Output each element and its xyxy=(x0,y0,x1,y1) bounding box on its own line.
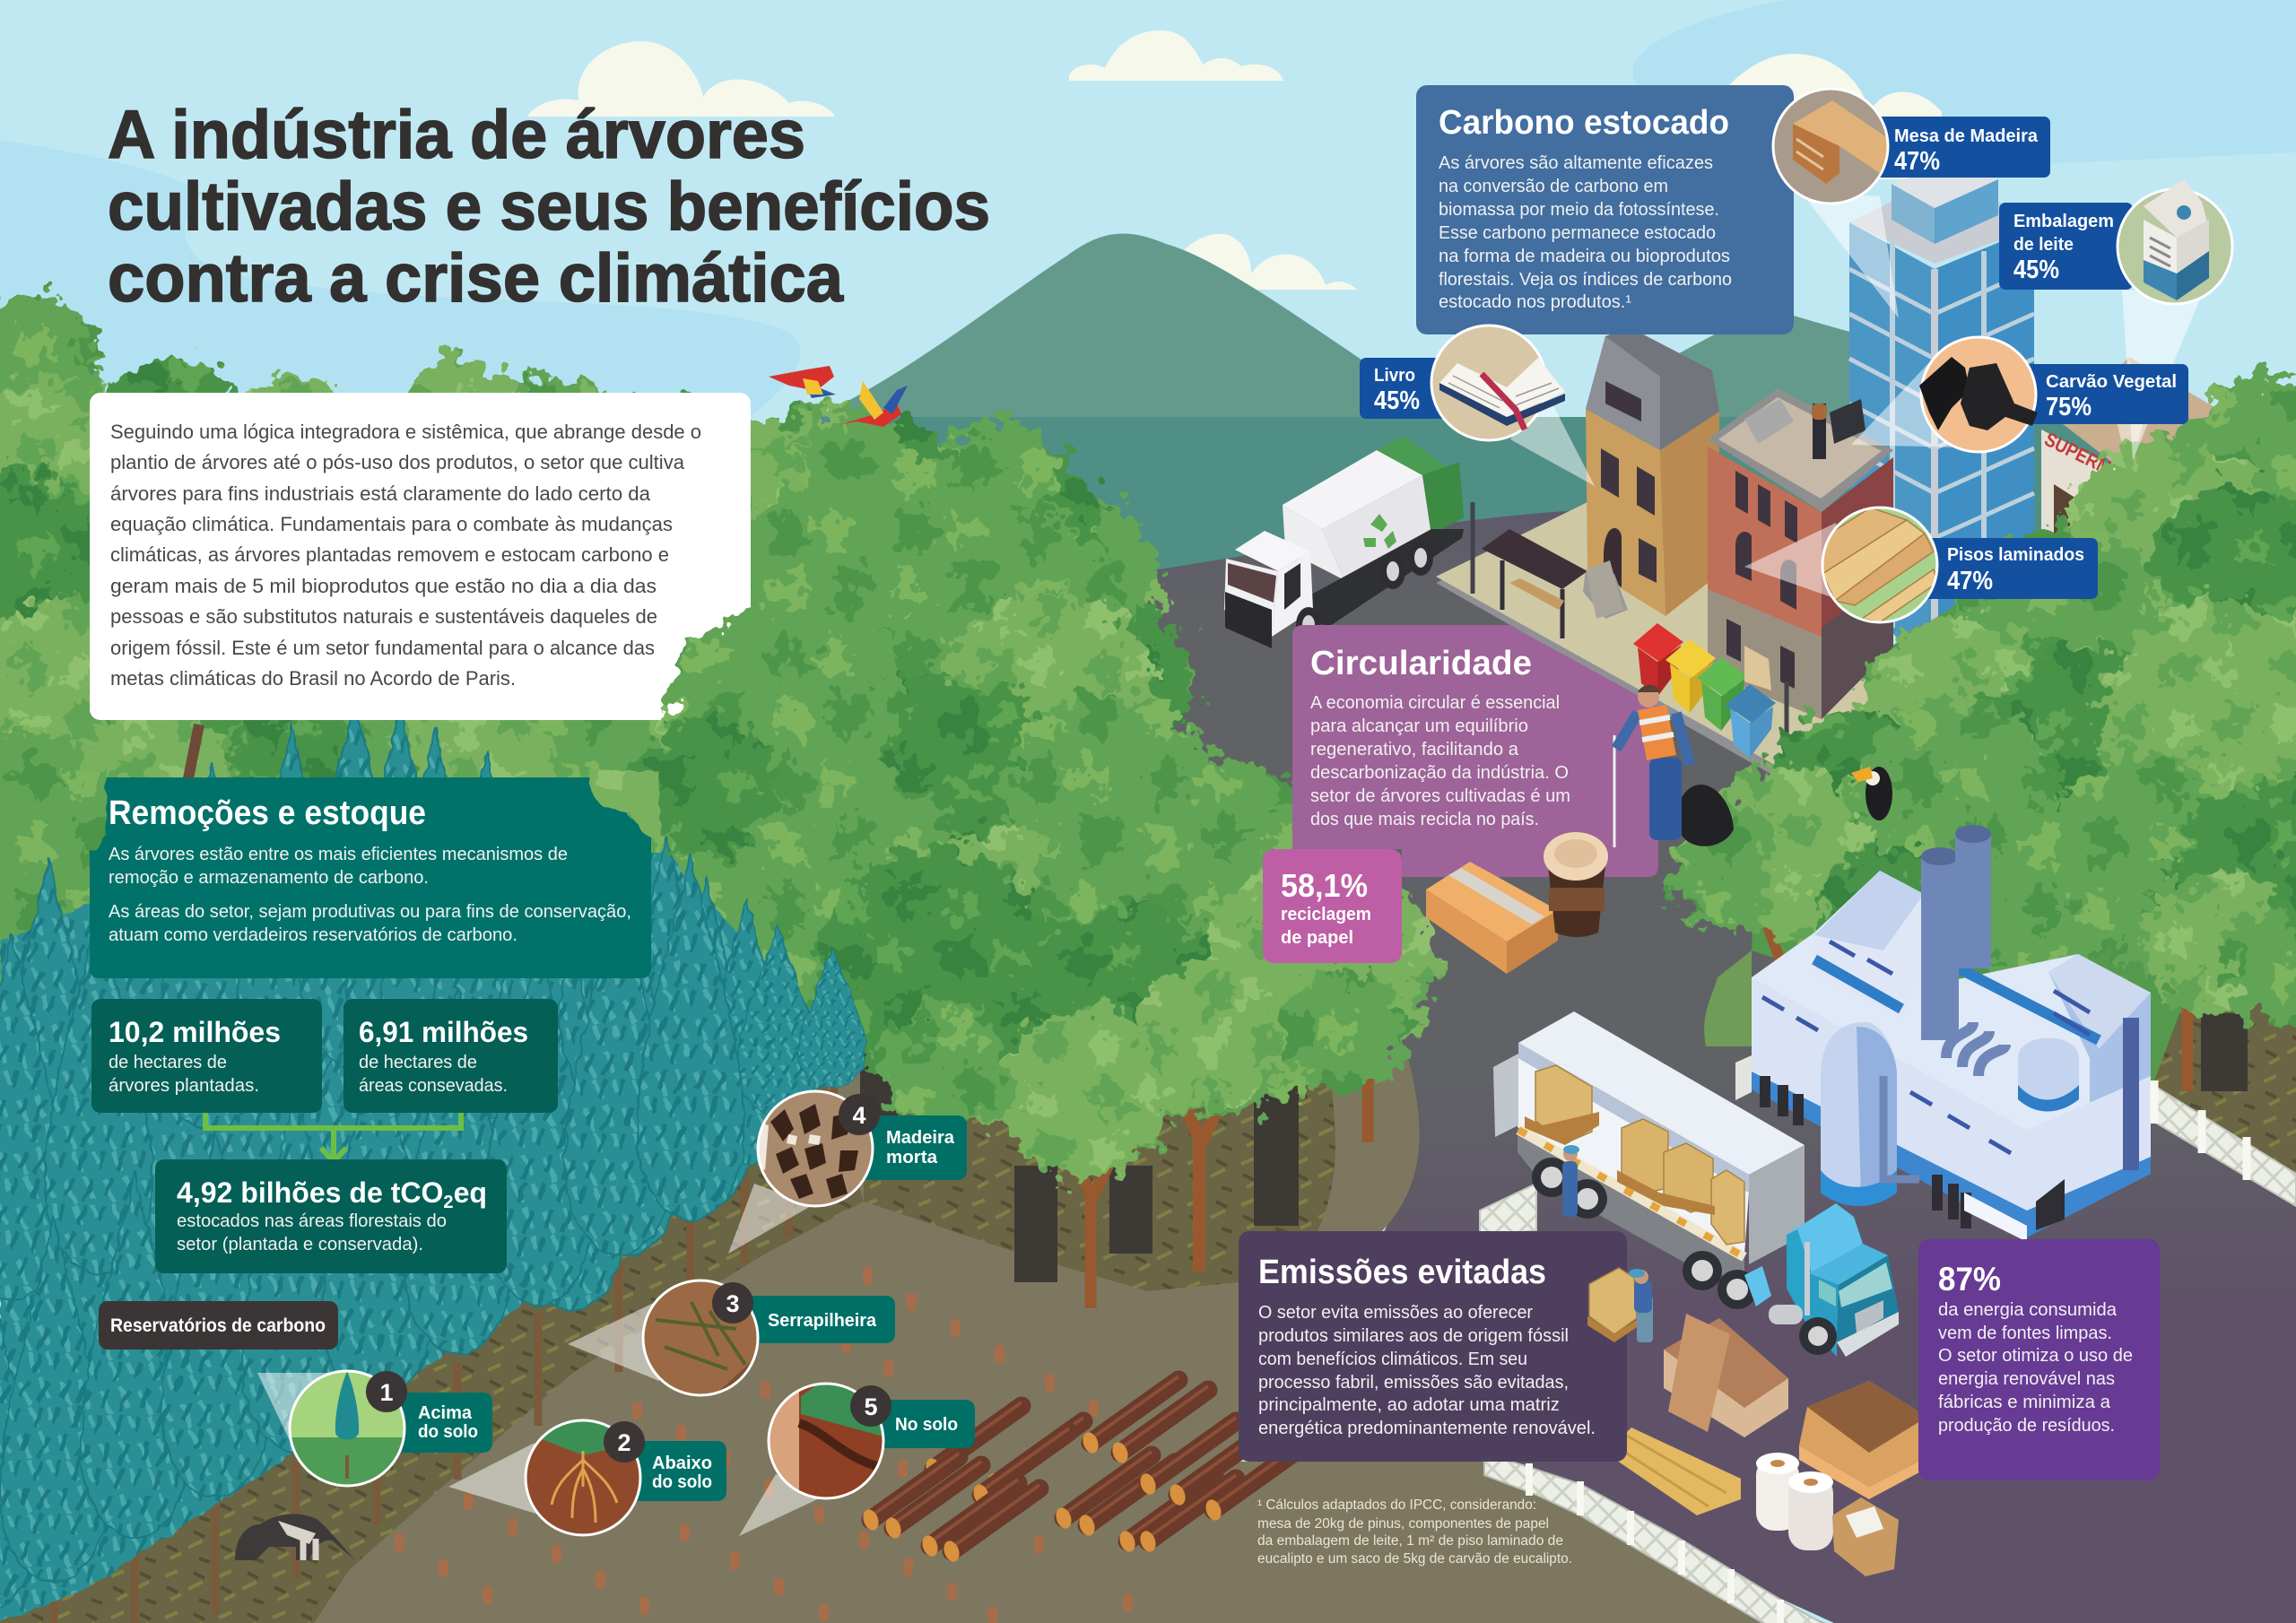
semi truck xyxy=(1493,1011,1899,1357)
carbon pool 2: abaixo do solo: Abaixo xyxy=(652,1454,712,1473)
toucan xyxy=(1851,767,1892,820)
central tree mass xyxy=(655,404,1435,1179)
product: carvão vegetal xyxy=(1919,337,2188,452)
recycling bins xyxy=(1633,623,1776,758)
left tree trunk under intro panel xyxy=(188,725,199,778)
worker with pallet xyxy=(1587,1268,1653,1342)
carbon pool 5: no solo: 5 xyxy=(864,1393,878,1420)
carbon pool 3: serrapilheira: Serrapilheira xyxy=(768,1311,877,1331)
left tree underlay xyxy=(0,430,879,1121)
carbono text: biomassa por meio da fotossíntese. xyxy=(1439,199,1719,220)
intro text: plantio de árvores até o pós-uso dos produtos, o setor que cultiva xyxy=(110,451,684,473)
product: mesa de madeira: Mesa de Madeira xyxy=(1894,126,2039,146)
intro text: metas climáticas do Brasil no Acordo de Paris. xyxy=(110,667,516,690)
circularidade text: regenerativo, facilitando a xyxy=(1310,739,1519,759)
panel: emissões evitadas xyxy=(1239,1231,1627,1462)
carbon pool 3: serrapilheira: 3 xyxy=(726,1290,740,1317)
product: livro xyxy=(1360,325,1565,440)
panel: 87% energia limpa: 87% xyxy=(1938,1261,2001,1298)
intro text: geram mais de 5 mil bioprodutos que estão no dia a dia das xyxy=(110,575,657,597)
carbon pool 2: abaixo do solo: do solo xyxy=(652,1472,712,1492)
label: reservatórios de carbono: Reservatórios de carbono xyxy=(110,1315,326,1336)
heading: emissões: Emissões evitadas xyxy=(1258,1254,1546,1291)
bus stop and street lamps xyxy=(1473,502,1787,780)
intro text: Seguindo uma lógica integradora e sistêmica, que abrange desde o xyxy=(110,421,701,443)
title: contra a crise climática xyxy=(108,240,844,317)
carbono text: estocado nos produtos.¹ xyxy=(1439,291,1631,312)
product: carvão vegetal: Carvão Vegetal xyxy=(2046,372,2177,392)
skyscraper xyxy=(1849,170,2034,681)
stat: 58,1% reciclagem de papel: 58,1% xyxy=(1281,867,1368,904)
energia text: fábricas e minimiza a xyxy=(1938,1392,2111,1412)
intro text: climáticas, as árvores plantadas removem e estocam carbono e xyxy=(110,543,669,566)
product: carvão vegetal: 75% xyxy=(2046,393,2092,421)
stat: 4,92 bilhões: 4,92 bilhões de tCO xyxy=(177,1176,443,1209)
circularidade text: dos que mais recicla no país. xyxy=(1310,809,1539,829)
energia text: O setor otimiza o uso de xyxy=(1938,1345,2133,1366)
product: embalagem de leite xyxy=(1999,179,2232,304)
footnote: mesa de 20kg de pinus, componentes de papel xyxy=(1257,1516,1549,1532)
green tree trunks xyxy=(879,924,2224,1308)
red brick building xyxy=(1708,388,1893,719)
carbon pool 1: acima do solo: do solo xyxy=(418,1422,478,1442)
energia text: vem de fontes limpas. xyxy=(1938,1323,2112,1343)
cargo: boxes, lumber, paper rolls xyxy=(1605,1314,1931,1576)
intro panel xyxy=(90,393,751,720)
stat: 4,92 bilhões: eq xyxy=(454,1176,487,1209)
stat: 10,2 milhões: árvores plantadas. xyxy=(109,1075,259,1096)
stumps on the field xyxy=(395,1267,1133,1623)
stat: 58,1% reciclagem de papel: de papel xyxy=(1281,928,1353,948)
emissões text: processo fabril, emissões são evitadas, xyxy=(1258,1372,1569,1393)
product: pisos laminados: Pisos laminados xyxy=(1947,545,2084,565)
title xyxy=(108,97,990,317)
emissões text: energética predominantemente renovável. xyxy=(1258,1418,1596,1438)
tan townhouse xyxy=(1583,327,1719,619)
footnote: ¹ Cálculos adaptados do IPCC, considerando: xyxy=(1257,1497,1536,1513)
product: embalagem de leite: Embalagem xyxy=(2013,212,2114,231)
panel: carbono estocado xyxy=(1416,85,1794,334)
heading: remoções: Remoções e estoque xyxy=(109,794,426,832)
panel: remoções e estoque xyxy=(90,777,651,978)
connector arrow xyxy=(205,1113,461,1162)
product: mesa de madeira: 47% xyxy=(1894,147,1940,176)
left tree mass xyxy=(0,291,718,942)
factory xyxy=(1752,825,2151,1242)
carbono text xyxy=(1439,152,1732,312)
carbon pool 1: acima do solo xyxy=(290,1371,492,1491)
supermarket xyxy=(2041,357,2269,574)
product: embalagem de leite: de leite xyxy=(2013,235,2074,255)
carbon pool 4: madeira morta xyxy=(756,1091,967,1206)
circularidade text: para alcançar um equilíbrio xyxy=(1310,716,1528,736)
conifer plantation xyxy=(0,699,865,1623)
remoções text: As árvores estão entre os mais eficientes mecanismos de xyxy=(109,844,568,864)
circularidade text: descarbonização da indústria. O xyxy=(1310,762,1569,783)
foliage over remoções panel corners xyxy=(84,771,659,852)
label: reservatórios de carbono xyxy=(99,1301,338,1350)
emissões text xyxy=(1258,1302,1596,1438)
carbono text: na forma de madeira ou bioprodutos xyxy=(1439,246,1730,266)
product: livro: 45% xyxy=(1374,386,1420,415)
emissões text: principalmente, ao adotar uma matriz xyxy=(1258,1394,1560,1415)
product: embalagem de leite: 45% xyxy=(2013,256,2059,284)
stat: 4,92 bilhões xyxy=(155,1159,507,1273)
carbono text: na conversão de carbono em xyxy=(1439,176,1668,196)
carbon pool 4: madeira morta: Madeira xyxy=(886,1128,955,1148)
energia text: energia renovável nas xyxy=(1938,1368,2115,1389)
fence pieces xyxy=(1480,1055,1752,1237)
carbon pool 2: abaixo do solo: 2 xyxy=(617,1429,631,1456)
carbono text: As árvores são altamente eficazes xyxy=(1439,152,1713,173)
energia text: produção de resíduos. xyxy=(1938,1415,2115,1436)
anteater xyxy=(235,1514,355,1560)
remoções text: atuam como verdadeiros reservatórios de carbono. xyxy=(109,924,517,945)
emissões text: produtos similares aos de origem fóssil xyxy=(1258,1325,1569,1346)
supermarket: SUPERM xyxy=(2041,428,2116,480)
heading: carbono: Carbono estocado xyxy=(1439,104,1729,142)
intro text xyxy=(110,421,701,690)
magnifier beams: products xyxy=(1510,191,2202,605)
stat: 4,92 bilhões: 2 xyxy=(443,1193,454,1212)
title: A indústria de árvores xyxy=(108,97,805,173)
energia text: da energia consumida xyxy=(1938,1299,2118,1320)
clouds xyxy=(527,30,1942,290)
emissões text: O setor evita emissões ao oferecer xyxy=(1258,1302,1533,1323)
panel: 87% energia limpa xyxy=(1918,1239,2160,1480)
intro text: origem fóssil. Este é um setor fundamental para o alcance das xyxy=(110,637,655,659)
macaws xyxy=(769,366,908,427)
remoções text: remoção e armazenamento de carbono. xyxy=(109,867,429,888)
magnifier beams: carbon pools xyxy=(257,1184,827,1536)
product: pisos laminados: 47% xyxy=(1947,567,1993,595)
mountains xyxy=(807,234,2296,632)
remoções text: As áreas do setor, sejam produtivas ou para fins de conservação, xyxy=(109,901,631,922)
carbon pool 4: madeira morta: morta xyxy=(886,1148,938,1167)
circularidade text: A economia circular é essencial xyxy=(1310,692,1560,713)
carbon pool 3: serrapilheira xyxy=(643,1280,895,1395)
heading: circularidade: Circularidade xyxy=(1310,645,1532,682)
emissões text: com benefícios climáticos. Em seu xyxy=(1258,1349,1527,1369)
stat: 6,91 milhões: 6,91 milhões xyxy=(359,1016,528,1048)
panel: circularidade xyxy=(1292,625,1658,877)
carbono text: Esse carbono permanece estocado xyxy=(1439,222,1716,243)
stat: 6,91 milhões: de hectares de xyxy=(359,1052,477,1072)
carbon pool 2: abaixo do solo xyxy=(526,1420,726,1535)
energia text xyxy=(1938,1299,2133,1436)
intro text: pessoas e são substitutos naturais e sustentáveis daqueles de xyxy=(110,605,657,628)
lower fence xyxy=(1484,1453,1830,1623)
carbon pool 1: acima do solo: 1 xyxy=(379,1379,394,1406)
footnote xyxy=(1257,1497,1572,1567)
circularidade text: setor de árvores cultivadas é um xyxy=(1310,785,1570,806)
cardboard box xyxy=(1426,862,1558,974)
product: livro: Livro xyxy=(1374,366,1415,386)
carbono text: florestais. Veja os índices de carbono xyxy=(1439,269,1732,290)
stat: 6,91 milhões: áreas consevadas. xyxy=(359,1075,508,1096)
right fence xyxy=(2154,1081,2296,1206)
stat: 4,92 bilhões: estocados nas áreas florestais do xyxy=(177,1211,447,1231)
stat: 10,2 milhões xyxy=(91,999,322,1113)
footnote: da embalagem de leite, 1 m² de piso laminado de xyxy=(1257,1533,1563,1549)
carbon pool 1: acima do solo: Acima xyxy=(418,1403,473,1423)
title: cultivadas e seus benefícios xyxy=(108,169,990,245)
garbage truck xyxy=(1224,437,1464,648)
recycling worker xyxy=(1614,685,1734,847)
carbon pool 4: madeira morta: 4 xyxy=(852,1102,866,1129)
intro text: equação climática. Fundamentais para o combate às mudanças xyxy=(110,513,673,535)
remoções text xyxy=(109,844,631,945)
stat: 10,2 milhões: de hectares de xyxy=(109,1052,227,1072)
foliage overlapping intro panel corner xyxy=(641,605,892,852)
stat: 58,1% reciclagem de papel: reciclagem xyxy=(1281,905,1371,924)
product: pisos laminados xyxy=(1822,508,2098,622)
coffee cup xyxy=(1544,832,1608,937)
product: mesa de madeira xyxy=(1773,89,2050,204)
footnote: eucalipto e um saco de 5kg de carvão de eucalipto. xyxy=(1257,1551,1572,1567)
intro text: árvores para fins industriais está claramente do lado certo da xyxy=(110,482,650,505)
stat: 4,92 bilhões: setor (plantada e conservada). xyxy=(177,1234,423,1254)
stat: 58,1% reciclagem de papel xyxy=(1263,849,1402,963)
circularidade text xyxy=(1310,692,1570,829)
carbon pool 5: no solo xyxy=(769,1384,975,1504)
carbon pool 5: no solo: No solo xyxy=(895,1415,958,1435)
stat: 6,91 milhões xyxy=(344,999,558,1113)
log piles xyxy=(860,1376,1301,1564)
road and ground xyxy=(0,386,2296,1623)
sidewalk xyxy=(1436,502,1910,789)
stat: 10,2 milhões: 10,2 milhões xyxy=(109,1016,281,1048)
right tree mass xyxy=(1668,377,2296,1022)
